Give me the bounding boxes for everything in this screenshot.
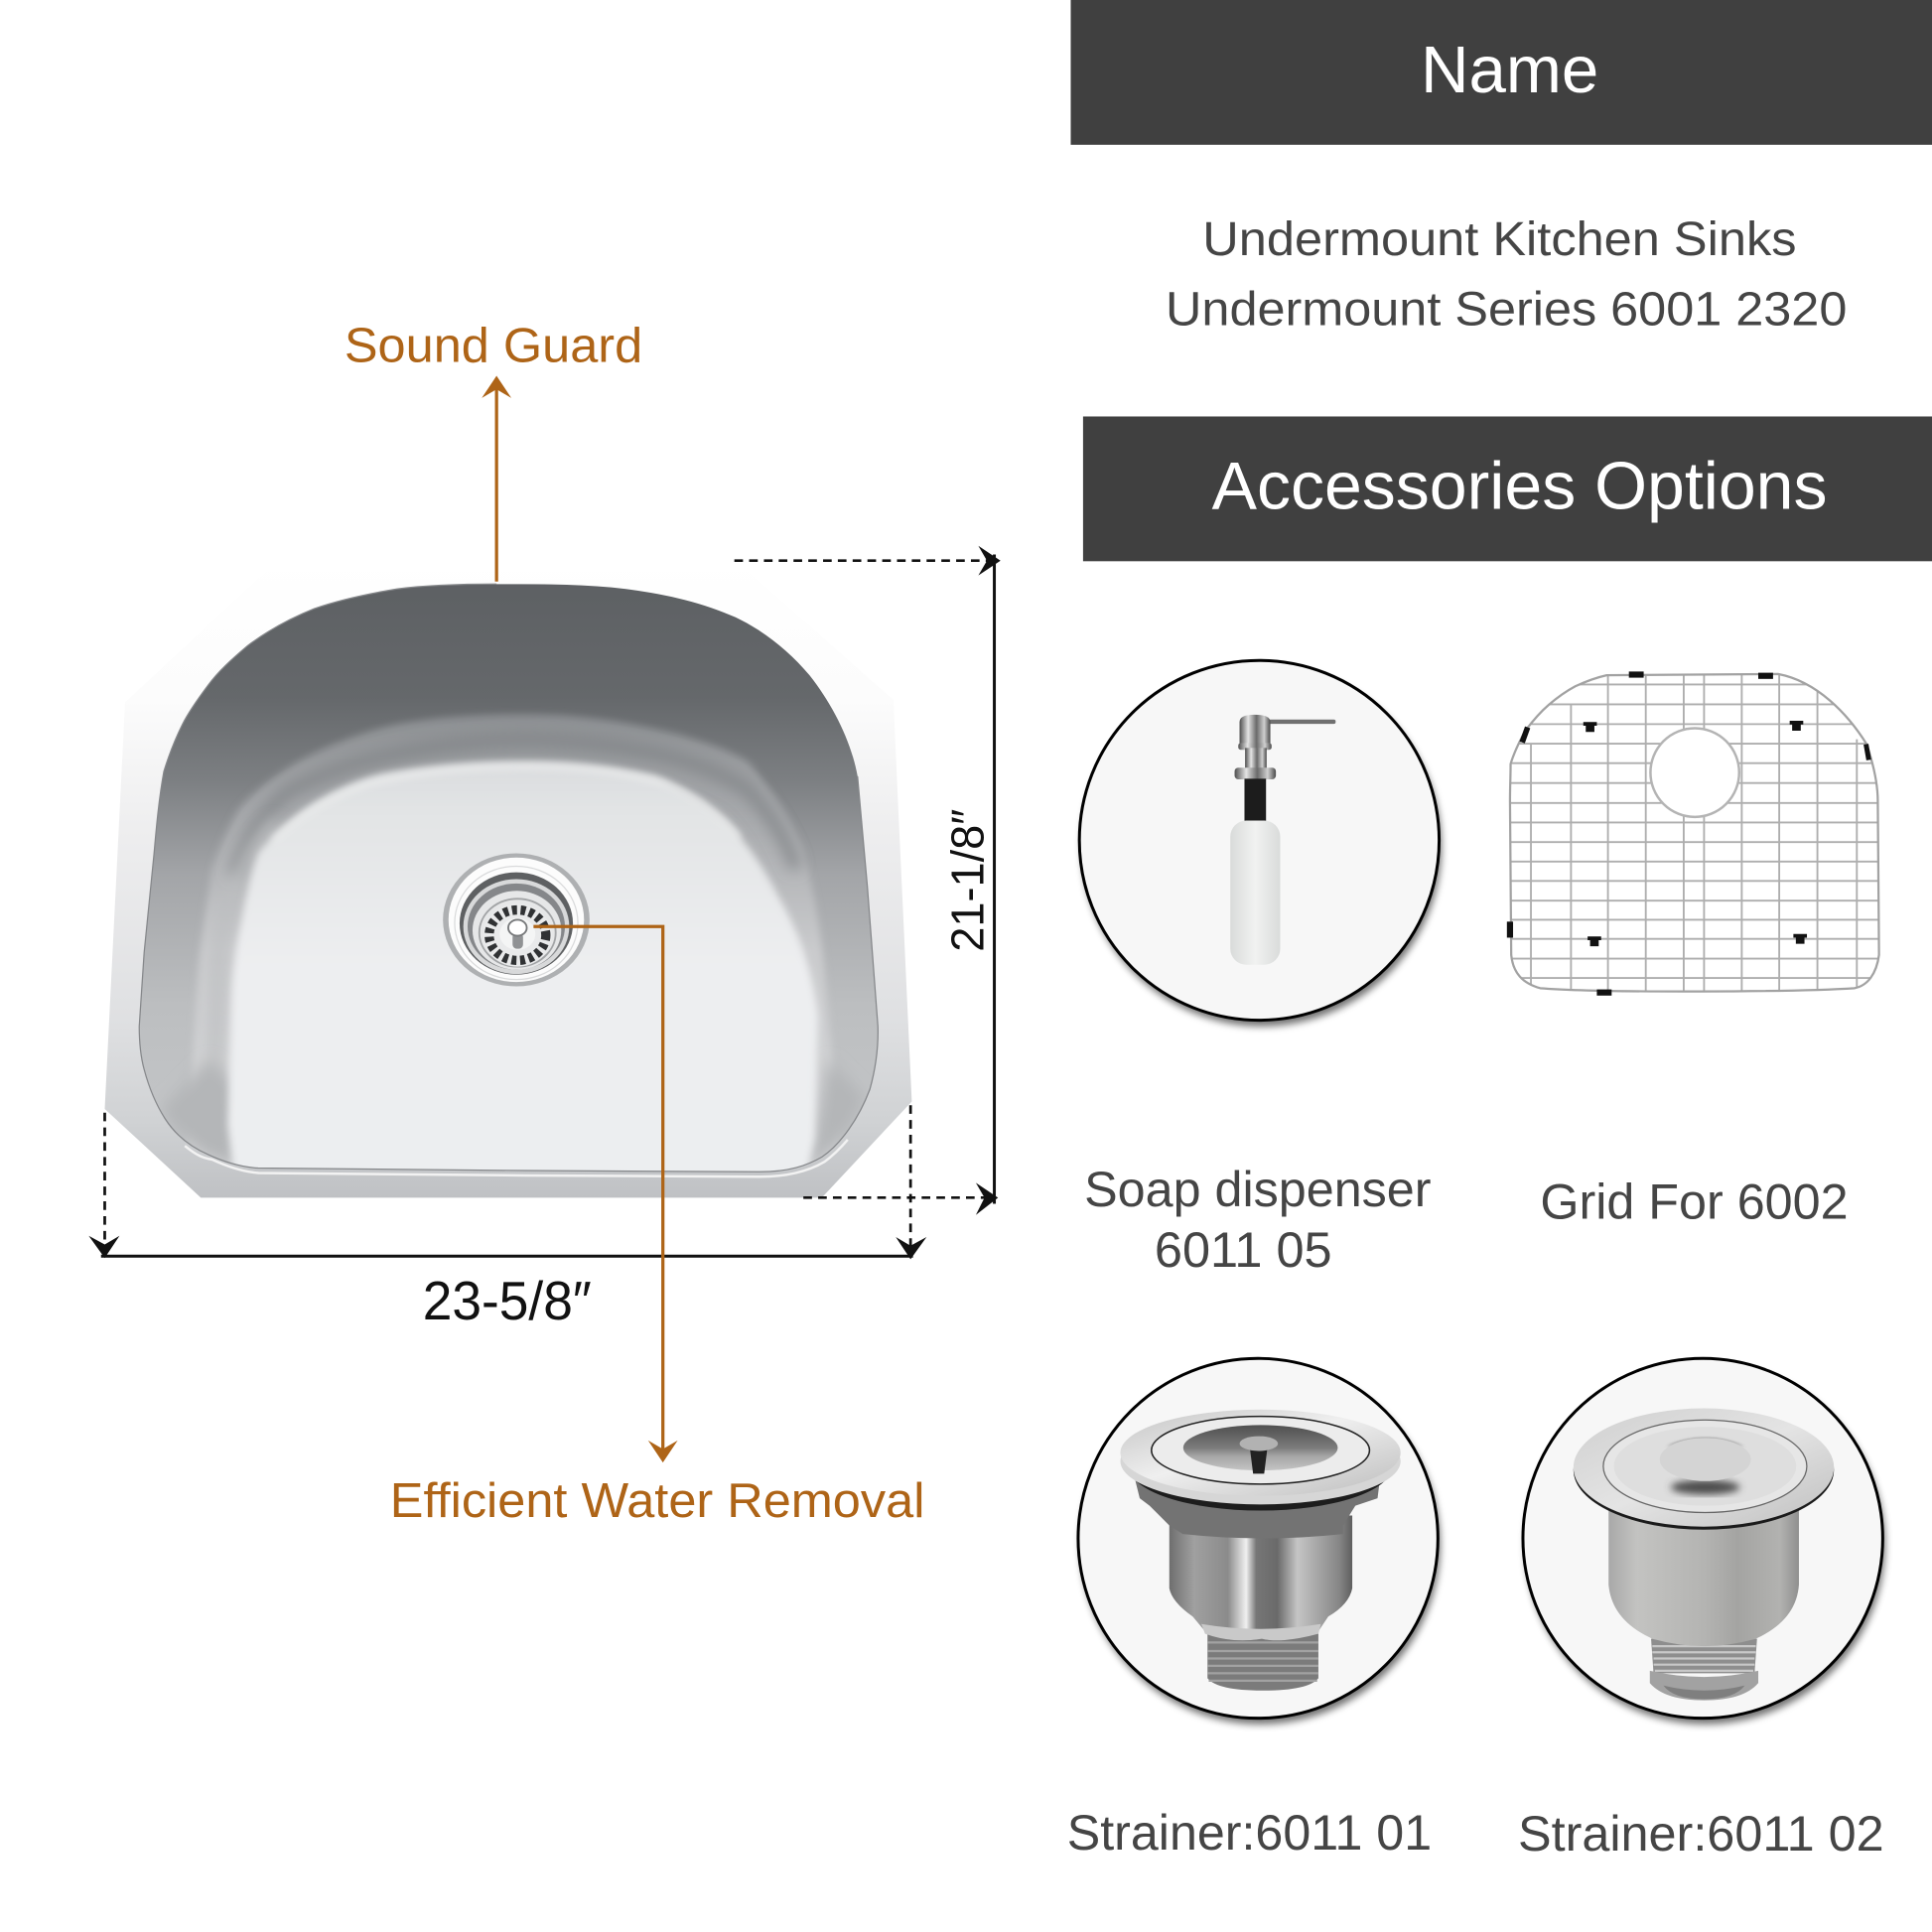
grid outline xyxy=(1510,674,1879,992)
label: soap dispenser xyxy=(1084,1162,1432,1278)
label: grid: Grid For 6002 xyxy=(1540,1173,1849,1229)
dimension: width 23-5/8 xyxy=(88,1105,926,1331)
icon: strainer body xyxy=(1574,1409,1834,1701)
callout: Sound Guard: Sound Guard xyxy=(345,319,642,372)
dimension: height 21-1/8 xyxy=(735,546,1001,1215)
icon: dispenser xyxy=(1230,715,1335,965)
dimension: width 23-5/8: 23-5/8″ xyxy=(423,1271,592,1331)
accessory: soap dispenser xyxy=(1079,660,1442,1027)
header: Accessories Options xyxy=(1083,416,1932,561)
icon: strainer body xyxy=(1121,1410,1401,1691)
grid drain hole xyxy=(1650,728,1739,817)
label: strainer 02: Strainer:6011 02 xyxy=(1518,1806,1884,1862)
callout: Efficient Water Removal xyxy=(390,926,924,1528)
drain xyxy=(443,853,590,986)
header: Name xyxy=(1070,0,1932,145)
product name text: Undermount Series 6001 2320 xyxy=(1166,283,1847,337)
callout: Efficient Water Removal: Efficient Water Removal xyxy=(390,1474,924,1528)
accessory: sink grid xyxy=(1503,665,1885,998)
grid clips and feet xyxy=(1507,671,1871,996)
label: soap dispenser: 6011 05 xyxy=(1155,1222,1332,1278)
sink flange xyxy=(104,558,911,1197)
label: strainer 01: Strainer:6011 01 xyxy=(1067,1805,1432,1861)
accessory: strainer 6011 02 xyxy=(1523,1358,1885,1725)
dimension: height 21-1/8: 21-1/8″ xyxy=(941,809,993,952)
label: soap dispenser: Soap dispenser xyxy=(1084,1162,1432,1217)
product name text xyxy=(1166,212,1847,337)
product name text: Undermount Kitchen Sinks xyxy=(1202,212,1796,266)
sink illustration xyxy=(104,558,911,1197)
sink basin xyxy=(123,573,899,1182)
basin rim xyxy=(139,584,878,1172)
callout: Sound Guard xyxy=(345,319,642,582)
header: Name: Name xyxy=(1421,33,1598,107)
accessory: strainer 6011 01 xyxy=(1078,1358,1441,1725)
header: Accessories Options: Accessories Options xyxy=(1212,450,1828,524)
